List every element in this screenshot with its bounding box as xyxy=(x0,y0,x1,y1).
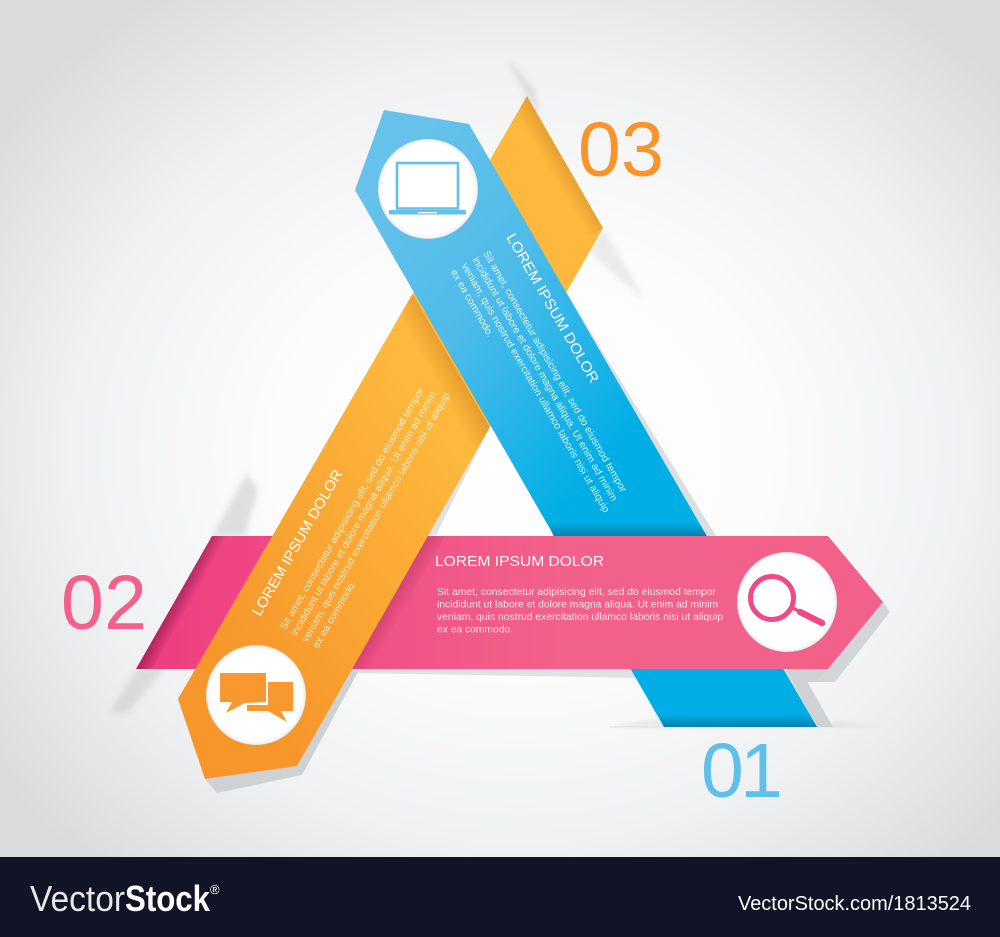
footer image id: VectorStock.com/1813524 xyxy=(738,893,971,915)
fold shadows on the paper xyxy=(110,58,880,728)
circle icon: speech bubbles xyxy=(206,645,306,745)
strip 02: pink left section xyxy=(136,536,500,669)
number 02: 02 xyxy=(61,560,147,646)
text block: pink strip: ex ea commodo. xyxy=(437,624,513,636)
footer logo: ® xyxy=(210,882,220,897)
strip 03: orange arrow xyxy=(178,96,603,779)
text block: orange strip xyxy=(250,362,464,652)
text block: orange strip: ex ea commodo. xyxy=(311,579,358,650)
pink strip inner shading xyxy=(136,536,445,669)
text block: blue strip xyxy=(447,231,661,521)
footer bar xyxy=(0,857,1000,937)
circle icon: laptop xyxy=(378,139,478,239)
text block: blue strip: Sit amet, consectetur adipisicing elit, sed do eiusmod tempor xyxy=(480,249,629,495)
text block: pink strip xyxy=(435,554,723,636)
footer logo xyxy=(30,878,220,919)
text block: pink strip: LOREM IPSUM DOLOR xyxy=(435,554,604,570)
number 03: 03 xyxy=(578,107,664,193)
text block: blue strip: ex ea commodo. xyxy=(448,268,495,339)
strip 01: blue arrow xyxy=(355,110,817,727)
blue strip shading at pink edge and bottom xyxy=(549,522,817,727)
orange strip shading next to blue strip xyxy=(391,96,603,452)
footer logo: Stock xyxy=(125,878,211,919)
text block: orange strip: LOREM IPSUM DOLOR xyxy=(250,467,346,619)
footer logo: Vector xyxy=(30,878,125,919)
text block: orange strip: Sit amet, consectetur adipisicing elit, sed do eiusmod tempor xyxy=(278,386,427,632)
text block: blue strip: veniam, quis nostrud exercitation ullamco laboris nisi ut aliquip xyxy=(459,262,611,515)
text block: pink strip: veniam, quis nostrud exercitation ullamco laboris nisi ut aliquip xyxy=(437,612,723,623)
text block: blue strip: LOREM IPSUM DOLOR xyxy=(503,231,601,386)
gray drop shadows of the strips xyxy=(205,282,890,793)
text block: orange strip: veniam, quis nostrud exercitation ullamco laboris nisi ut aliquip xyxy=(300,391,453,644)
text block: pink strip: Sit amet, consectetur adipisicing elit, sed do eiusmod tempor xyxy=(437,587,717,598)
number 01: 01 xyxy=(701,728,783,814)
strip 02: pink right section with arrowhead xyxy=(490,536,883,669)
text block: pink strip: incididunt ut labore et dolore magna aliqua. Ut enim ad minim xyxy=(437,600,718,610)
text block: orange strip: incididunt ut labore et dolore magna aliqua. Ut enim ad minim xyxy=(289,390,439,638)
text block: blue strip: incididunt ut labore et dolore magna aliqua. Ut enim ad minim xyxy=(470,255,619,503)
circle icon: magnifying glass xyxy=(737,552,837,652)
